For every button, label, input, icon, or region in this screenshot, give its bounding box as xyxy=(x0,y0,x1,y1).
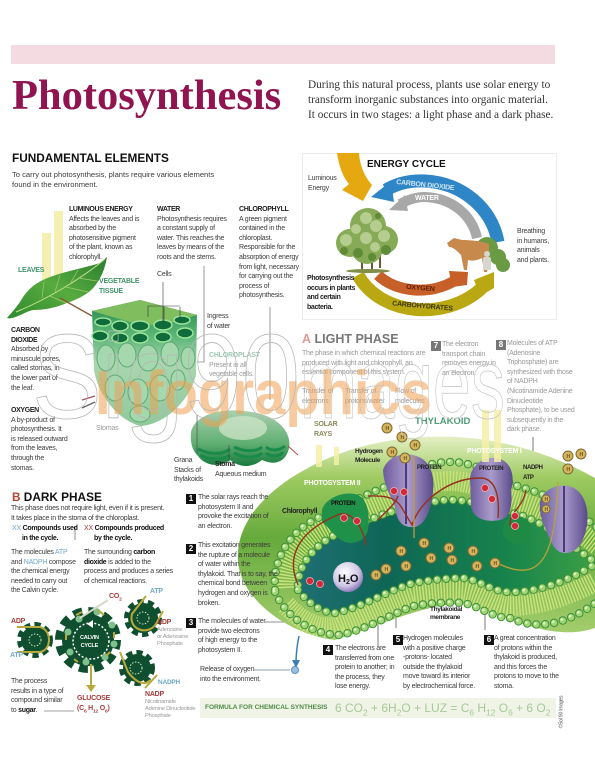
label: hydrogen molecule xyxy=(355,448,383,464)
step connector lines xyxy=(265,437,533,646)
label: adp right xyxy=(157,619,188,648)
label: transfer of protons: protons/water xyxy=(345,398,385,405)
text: chlorophyll: A green pigment xyxy=(239,216,287,223)
label: nadp: NADP xyxy=(145,691,164,698)
label: glucose: GLUCOSE xyxy=(77,695,110,702)
label: solar rays: RAYS xyxy=(314,431,332,438)
text: luminous energy xyxy=(69,206,140,261)
step 4: transferred from one xyxy=(335,655,394,662)
text: chlorophyll: absorption of energy xyxy=(239,254,298,261)
label: photosystem I: PHOTOSYSTEM I xyxy=(467,448,522,455)
step 6: thylakoid is produced, xyxy=(494,654,557,661)
illustration: thylakoid xyxy=(238,410,595,640)
label: nadp: Nicotinamide xyxy=(145,699,176,705)
step 3: The molecules of water xyxy=(198,618,266,625)
text: luminous energy: absorbed by the xyxy=(69,225,116,232)
text: molecules atp: the chemical energy xyxy=(11,568,69,575)
label: protein three: PROTEIN xyxy=(479,466,503,472)
label: nadph atp xyxy=(523,464,543,481)
illustration: vegetable tissue block xyxy=(82,266,270,426)
text: carbon dioxide added: of chemical reactions. xyxy=(84,578,147,585)
step 2: This excitation generates xyxy=(198,542,270,549)
illustration: bushes xyxy=(476,237,510,272)
step 4 xyxy=(323,644,394,690)
text: carbon dioxide added xyxy=(84,548,173,585)
text: chlorophyll: photosynthesis. xyxy=(239,292,284,299)
step 6: protons to move to the xyxy=(494,673,559,680)
step 8: Triphosphate) are xyxy=(507,359,558,366)
label: water: WATER xyxy=(415,195,439,202)
text: carbon dioxide: the lower part of xyxy=(11,375,57,382)
step 5: by electrochemical force. xyxy=(403,683,475,690)
label: grana xyxy=(174,457,203,483)
protein: third purple complex xyxy=(540,486,588,553)
labels: transfer legend: Transfer of xyxy=(302,388,333,395)
credit: ©Sol 90 Images xyxy=(558,696,564,728)
label: photosystem II: PHOTOSYSTEM II xyxy=(304,480,360,487)
step 1: 1 xyxy=(189,494,193,503)
text: carbon dioxide xyxy=(11,327,60,392)
text: carbon dioxide added: process and produces a series xyxy=(84,568,173,575)
h2o sphere: H xyxy=(338,573,346,585)
text: chloroplast xyxy=(209,352,260,378)
step 7: removes energy in xyxy=(442,360,496,367)
step 5: with a positive charge xyxy=(403,645,465,652)
step 2: the rupture of a molecule xyxy=(198,552,270,559)
hydrogen protons: HHHHHHHHHHHHHHHHHHHHH xyxy=(374,426,584,579)
label: adp left: ADP xyxy=(11,618,25,625)
step 2: broken. xyxy=(198,600,220,607)
label: glucose: (C6 H12 O6) xyxy=(77,705,110,714)
watermark: Sig90 xyxy=(32,310,300,444)
step 2 xyxy=(186,542,278,607)
label: ingress of water: of water xyxy=(207,323,230,330)
text: fundamental elements intro: found in the environment. xyxy=(12,180,98,189)
label: luminous energy: Energy xyxy=(308,185,329,192)
step 3: of high energy to the xyxy=(198,637,257,644)
step 1: The solar rays reach the xyxy=(198,494,268,501)
step 1 xyxy=(186,494,269,530)
text: carbon dioxide added: dioxide is added to the xyxy=(84,559,151,566)
label: atp left: ATP xyxy=(10,652,23,659)
step 7 xyxy=(431,340,496,377)
text: release of oxygen: Release of oxygen xyxy=(200,666,254,673)
legend: compounds used: XX Compounds used xyxy=(12,525,78,532)
label: vegetable tissue: VEGETABLE xyxy=(99,278,139,285)
text: process results: The process xyxy=(11,678,47,685)
step 7: The electron xyxy=(442,341,478,348)
step 1: an electron. xyxy=(198,523,232,530)
text: light phase intro: essential component of this system. xyxy=(302,369,405,376)
text: water: Photosynthesis requires xyxy=(157,216,227,223)
text: molecules atp: The molecules ATP xyxy=(11,549,67,556)
label: glucose xyxy=(77,694,110,714)
text: dark phase intro: This phase does not require light, even if it is present. xyxy=(11,505,164,512)
step 4: 4 xyxy=(326,645,330,654)
step 6: and this forces the xyxy=(494,664,547,671)
text: carbon dioxide: called stomas, in xyxy=(11,365,59,372)
text: release of oxygen: into the environment. xyxy=(200,676,261,683)
step 3: photosystem II. xyxy=(198,647,242,654)
label: transfer of protons xyxy=(345,388,385,405)
label: carbohydrates: CARBOHYDRATES xyxy=(392,300,453,313)
arrow: water xyxy=(389,195,477,238)
text: molecules atp: the Calvin cycle. xyxy=(11,587,58,594)
label: chlorophyll: Chlorophyll xyxy=(282,508,317,515)
step 8: dark phase. xyxy=(507,426,541,433)
label: atp top: ATP xyxy=(150,588,163,595)
label: adp right: ADP xyxy=(157,619,171,626)
label: grana: Grana xyxy=(174,457,192,464)
label: nadp: Adenine Dinucleotide xyxy=(145,706,195,712)
text: light phase intro xyxy=(302,350,426,376)
text: chloroplast: vegetable cells. xyxy=(209,371,254,378)
label: nadph: NADPH xyxy=(158,679,180,686)
text: light phase intro: The phase in which chemical reactions are xyxy=(302,350,425,357)
intro text: During this natural process, plants use solar energy to xyxy=(308,79,550,91)
title: Photosynthesis xyxy=(12,72,281,119)
label: solar rays: SOLAR xyxy=(314,421,337,428)
label: flow of molecules: Flow of xyxy=(395,388,416,395)
step 2: chemical bond between xyxy=(198,580,267,587)
step 5: 5 xyxy=(396,635,400,644)
step 5: Hydrogen molecules xyxy=(403,635,463,642)
step 8: of NADPH xyxy=(507,378,538,385)
text: chlorophyll: from light, necessary xyxy=(239,264,299,271)
step 6: A great concentration xyxy=(494,635,556,642)
lipid tails xyxy=(286,481,595,627)
label: photosynthesis occurs: and certain xyxy=(307,294,340,301)
illustration: tree xyxy=(336,208,398,273)
illustration: cow xyxy=(447,238,489,272)
step 5: -protons- located xyxy=(403,654,452,661)
panel: energy cycle xyxy=(302,153,556,320)
formula band xyxy=(200,698,556,718)
text: dark phase intro xyxy=(11,504,164,522)
step 8: (Adenosine xyxy=(507,350,540,357)
text: chlorophyll: Responsible for the xyxy=(239,244,295,251)
h2o sphere: 2 xyxy=(346,579,350,586)
text: process results: to sugar. xyxy=(11,707,37,714)
step 7: an electron. xyxy=(442,370,476,377)
label: vegetable tissue: TISSUE xyxy=(99,288,123,295)
intro text xyxy=(308,79,553,121)
arrow: proton flow xyxy=(495,482,558,570)
step 8 xyxy=(496,340,575,433)
text: dark phase intro: It takes place in the stoma of the chloroplast. xyxy=(11,515,139,522)
text: fundamental elements intro: To carry out photosynthesis, plants require various elements xyxy=(12,170,214,179)
step 8: subsequently in the xyxy=(507,417,563,424)
text: carbon dioxide: DIOXIDE xyxy=(11,337,37,344)
arrow: carbon dioxide xyxy=(371,181,498,242)
text: water: roots and the stems. xyxy=(157,254,216,261)
icon: light rays on leaf xyxy=(42,211,63,293)
text: process results xyxy=(11,677,63,715)
labels: transfer legend xyxy=(302,388,334,405)
text: molecules atp: and NADPH compose xyxy=(11,559,76,566)
text: oxygen: photosynthesis. It xyxy=(11,426,62,433)
legend: compounds produced: by the cycle. xyxy=(94,535,132,542)
header band xyxy=(11,45,555,64)
step 4: protein to another; in xyxy=(335,664,394,671)
label: flow of molecules xyxy=(395,388,425,405)
text: oxygen: from the leaves, xyxy=(11,445,57,452)
step 2: thylakoid. That is to say, the xyxy=(198,571,278,578)
label: flow of molecules: molecules xyxy=(395,398,425,405)
text: process results: compound similar xyxy=(11,697,62,704)
step 6: stoma. xyxy=(494,683,514,690)
text: chlorophyll: CHLOROPHYLL xyxy=(239,206,288,213)
intro text: transform inorganic substances into organic material. xyxy=(308,94,548,106)
label: transfer of protons: Transfer of xyxy=(345,388,376,395)
label: solar rays xyxy=(314,421,338,438)
step 4: The electrons are xyxy=(335,645,386,652)
illustration: leaf xyxy=(7,257,107,318)
arrow: oxygen xyxy=(378,271,468,290)
label: photosynthesis occurs: Photosynthesis xyxy=(307,275,354,282)
protein: second purple complex xyxy=(470,458,513,521)
text: molecules atp: needed to carry out xyxy=(11,578,67,585)
step 8: Molecules of ATP xyxy=(507,340,557,347)
text: oxygen: is released outward xyxy=(11,436,68,443)
protein: first purple complex xyxy=(383,454,433,527)
label: protein two: PROTEIN xyxy=(417,465,441,471)
label: protein one: PROTEIN xyxy=(331,501,355,507)
label: vegetable tissue xyxy=(99,278,140,295)
legend: compounds produced xyxy=(84,524,164,542)
label: stoma xyxy=(215,461,266,478)
label: breathing: in humans, xyxy=(517,238,549,245)
text: chloroplast: CHLOROPLAST xyxy=(209,352,260,359)
watermark: mages xyxy=(300,328,505,440)
text: carbon dioxide: CARBON xyxy=(11,327,40,334)
label: adp right: Phosphate xyxy=(157,641,183,647)
label: thylakoid: THYLAKOID xyxy=(415,416,470,427)
label: stomas: Stomas xyxy=(96,425,118,432)
label: adp right: or Adenosine xyxy=(157,634,188,640)
step 3 xyxy=(186,618,266,654)
label: grana: Stacks of xyxy=(174,467,201,474)
step 8: Dinucleotide xyxy=(507,398,543,405)
watermark: Infographics xyxy=(95,359,432,428)
step 6 xyxy=(484,634,559,690)
label: photosynthesis occurs: occurs in plants xyxy=(307,285,355,292)
step 7: transport chain xyxy=(442,351,485,358)
label: leaves: LEAVES xyxy=(18,267,44,274)
label: stoma: Stoma xyxy=(215,461,235,468)
label: breathing: animals xyxy=(517,247,540,254)
label: cells: Cells xyxy=(157,271,171,278)
label: photosynthesis occurs: bacteria. xyxy=(307,304,333,311)
protein: photosystem II xyxy=(322,493,369,543)
text: chlorophyll: for carrying out the xyxy=(239,273,293,280)
step 5: outside the thylakoid xyxy=(403,664,462,671)
step 7: 7 xyxy=(434,341,438,350)
step 1: photosystem II and xyxy=(198,504,253,511)
arrow: luminous energy xyxy=(337,153,372,201)
text: water: water. This reaches the xyxy=(157,235,224,242)
heading: energy cycle: ENERGY CYCLE xyxy=(367,159,446,170)
formula: 6 CO2 + 6H2O + LUZ = C6 H12 O6 + 6 O2 xyxy=(335,701,550,717)
illustration: person xyxy=(483,251,491,270)
text: oxygen: A by-product of xyxy=(11,417,55,424)
bead rows xyxy=(275,462,595,635)
legend: compounds used xyxy=(12,524,78,542)
label: thylakoidal membrane: Thylakoidal xyxy=(430,606,462,613)
lumen xyxy=(298,500,595,613)
text: carbon dioxide: minuscule pores, xyxy=(11,356,60,363)
text: molecules atp xyxy=(11,548,76,594)
text: process results: results in a type of xyxy=(11,688,63,695)
text: luminous energy: chlorophyll. xyxy=(69,254,102,261)
legend: compounds produced: XX Compounds produced xyxy=(84,525,164,532)
label: calvin cycle: CALVIN xyxy=(80,635,99,641)
label: ingress of water xyxy=(207,313,230,330)
step 5 xyxy=(393,634,475,690)
label: carbon dioxide: CARBON DIOXIDE xyxy=(396,179,455,192)
step 2: of water within the xyxy=(198,561,250,568)
labels: transfer legend: electrons xyxy=(302,398,328,405)
label: hydrogen molecule: Molecule xyxy=(355,456,380,464)
text: carbon dioxide: Absorbed by xyxy=(11,346,48,353)
step 6: of protons within the xyxy=(494,645,552,652)
formula label: FORMULA FOR CHEMICAL SYNTHESIS xyxy=(205,704,327,711)
step 6: 6 xyxy=(487,635,491,644)
text: luminous energy: photosensitive pigment xyxy=(69,235,136,242)
text: oxygen: stomas. xyxy=(11,465,34,472)
illustration: chloroplast xyxy=(191,410,298,466)
label: calvin cycle: CYCLE xyxy=(81,642,98,648)
step 4: lose energy. xyxy=(335,683,370,690)
h2o sphere xyxy=(333,562,363,592)
text: luminous energy: LUMINOUS ENERGY xyxy=(69,206,133,213)
step 4: the process, they xyxy=(335,674,385,681)
text: release of oxygen xyxy=(200,666,261,683)
text: chlorophyll xyxy=(239,206,300,299)
label: thylakoidal membrane xyxy=(430,606,462,621)
intro text: It occurs in two stages: a light phase and a dark phase. xyxy=(308,109,553,121)
text: luminous energy: Affects the leaves and is xyxy=(69,216,139,223)
text: luminous energy: of the plant, known as xyxy=(69,244,132,251)
step 8: (Nicotinamide Adenine xyxy=(507,388,572,395)
electrons xyxy=(306,484,518,588)
step 8: 8 xyxy=(499,340,503,349)
text: carbon dioxide: the leaf. xyxy=(11,385,34,392)
text: chlorophyll: chloroplast. xyxy=(239,235,272,242)
label: hydrogen molecule: Hydrogen xyxy=(355,448,383,455)
solar rays xyxy=(316,410,501,467)
arrow: carbohydrates xyxy=(358,272,494,310)
text: chlorophyll: process of xyxy=(239,283,269,290)
text: carbon dioxide added: The surrounding carbon xyxy=(84,549,155,556)
heading: dark phase: B DARK PHASE xyxy=(12,490,102,504)
step 3: 3 xyxy=(189,618,193,627)
step 8: synthesized with those xyxy=(507,369,573,376)
label: nadp: Phosphate xyxy=(145,713,171,719)
label: breathing: Breathing xyxy=(517,228,545,235)
protein: small green complex xyxy=(503,516,531,544)
heading: light phase: A LIGHT PHASE xyxy=(302,332,399,346)
label: breathing xyxy=(517,228,549,264)
h2o sphere: O xyxy=(350,573,359,585)
label: luminous energy xyxy=(308,174,337,192)
text: water: leaves by means of the xyxy=(157,244,224,251)
step 5: move toward its interior xyxy=(403,673,470,680)
text: oxygen: OXYGEN xyxy=(11,407,39,414)
label: luminous energy: Luminous xyxy=(308,175,337,182)
legend: compounds used: in the cycle. xyxy=(22,535,58,542)
arrows: electron path xyxy=(293,478,526,585)
step 1: provoke the excitation of xyxy=(198,513,268,520)
step 2: hydrogen and oxygen is xyxy=(198,590,268,597)
text: water: a constant supply of xyxy=(157,225,215,232)
text: chlorophyll: contained in the xyxy=(239,225,285,232)
step 8: Phosphate), to be used xyxy=(507,407,575,414)
text: water: WATER xyxy=(157,206,180,213)
label: nadp xyxy=(145,691,195,720)
text: oxygen: through the xyxy=(11,455,44,462)
heading: fundamental elements: FUNDAMENTAL ELEMENTS xyxy=(12,151,169,165)
label: calvin cycle xyxy=(80,635,99,650)
label: photosynthesis occurs xyxy=(307,274,356,311)
step 3: provide two electrons xyxy=(198,628,260,635)
stroma body xyxy=(238,437,595,640)
label: stoma: Aqueous medium xyxy=(215,471,266,478)
label: ingress of water: Ingress xyxy=(207,313,228,320)
label: nadph atp: NADPH xyxy=(523,465,543,471)
text: water xyxy=(157,206,227,261)
label: breathing: and plants. xyxy=(517,257,549,264)
text: chloroplast: Present in all xyxy=(209,362,246,369)
text: light phase intro: produced with light and chlorophyll, an xyxy=(302,360,412,367)
text: oxygen xyxy=(11,407,68,472)
label: co2: CO2 xyxy=(109,593,122,602)
illustration: calvin cycle gears xyxy=(17,527,163,711)
label: grana: thylakoids xyxy=(174,476,203,483)
arrow: oxygen release xyxy=(254,636,300,674)
text: fundamental elements intro xyxy=(12,170,214,189)
step 2: 2 xyxy=(189,544,193,553)
label: adp right: Adenosine xyxy=(157,627,182,633)
label: nadph atp: ATP xyxy=(523,475,534,481)
label: thylakoidal membrane: membrane xyxy=(430,614,460,621)
label: oxygen: OXYGEN xyxy=(406,284,435,293)
